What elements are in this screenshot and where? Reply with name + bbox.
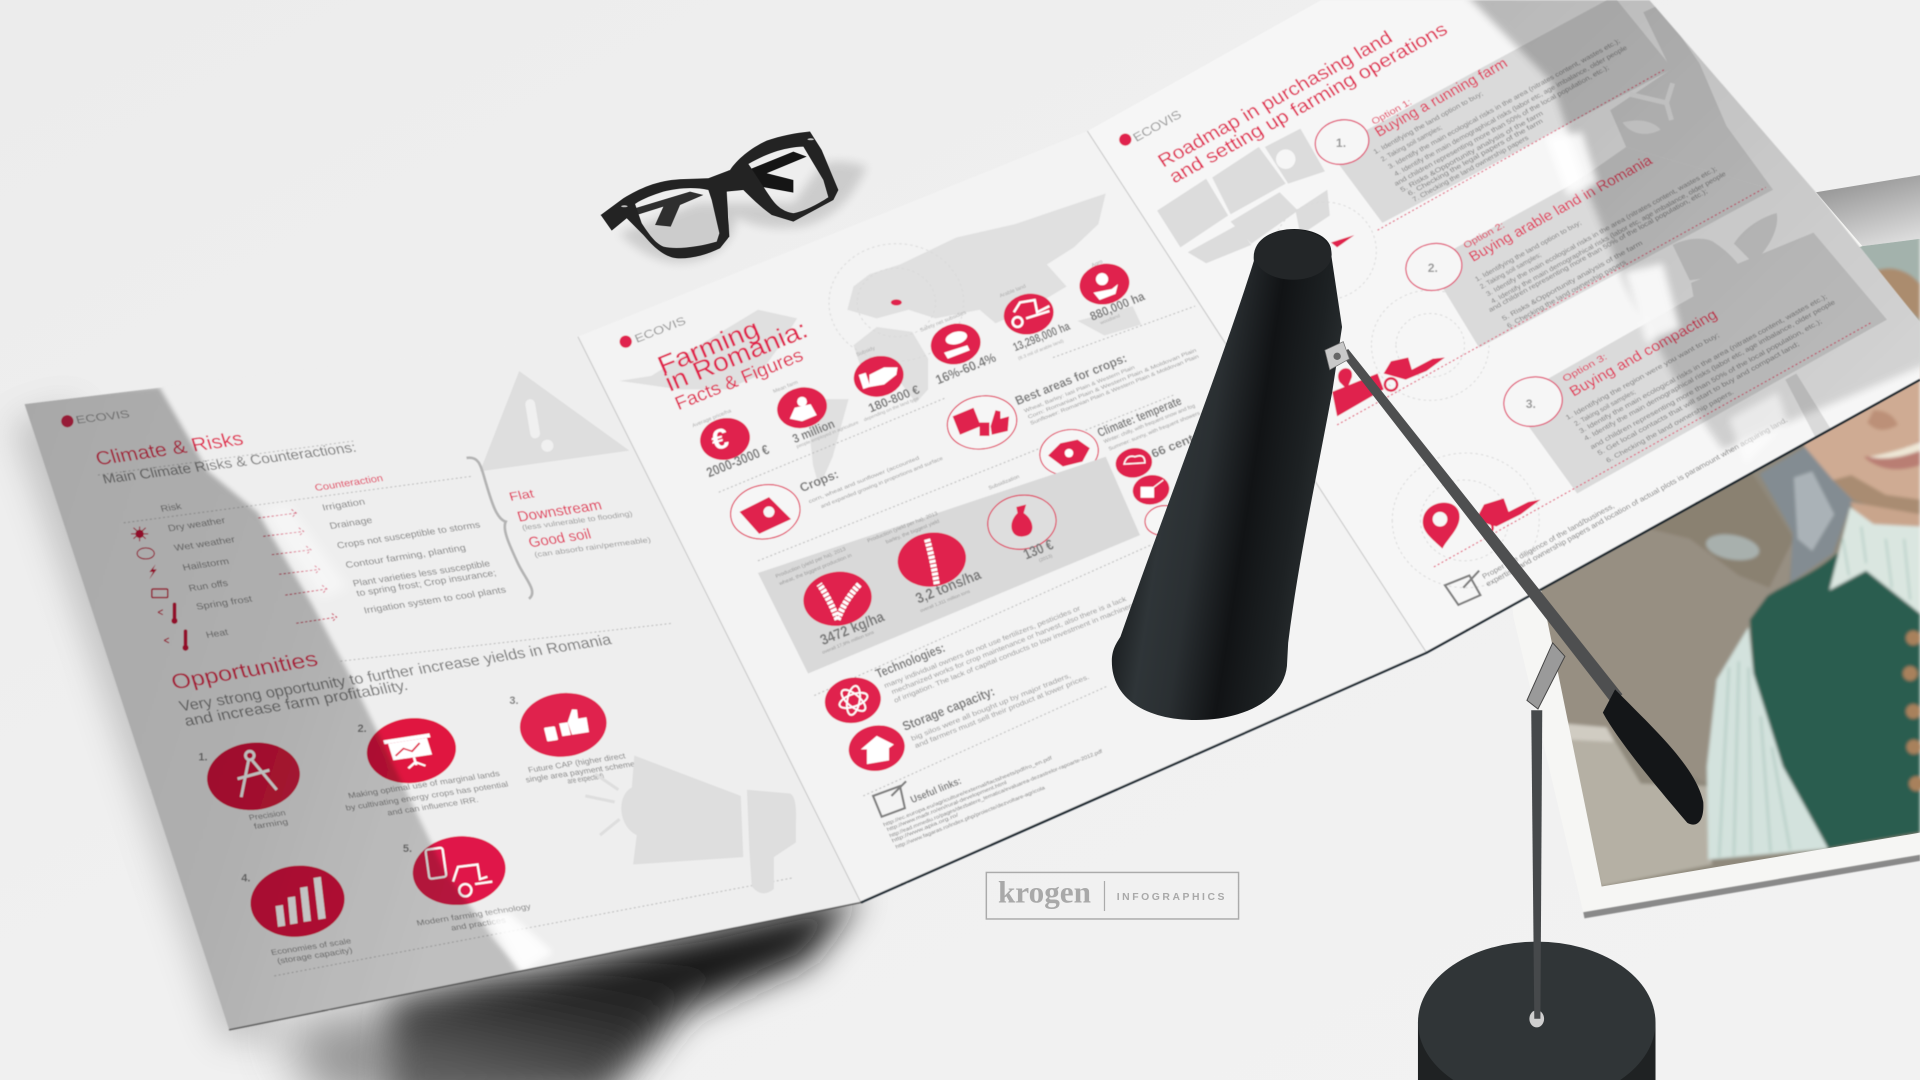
wheat yield: 3472 kg/ha xyxy=(818,609,887,649)
ecovis logo middle xyxy=(620,314,688,348)
opportunity 4: economies of scale: 4. xyxy=(241,873,250,885)
opportunities intro: and increase farm profitability. xyxy=(182,677,410,730)
neck xyxy=(1850,500,1920,528)
risk list: Heat xyxy=(205,627,230,640)
striped shirt xyxy=(1707,627,1828,860)
krogen infographics logo xyxy=(986,872,1239,919)
climate temperate: Winter: chilly, with frequent snow and fog xyxy=(1103,403,1196,445)
option 1: 1. Identifying the land option to buy; xyxy=(1372,90,1485,156)
crops: corn, wheat and sunflower (accounted xyxy=(808,456,920,505)
option 3: 1. Identifying the region were you want to buy; xyxy=(1565,332,1721,422)
watermark: wheat xyxy=(1286,551,1347,647)
ecovis logo left xyxy=(61,409,131,427)
useful links: http://ec.europa.eu/agriculture/external/factsheets/pdf/ro_en.pdf xyxy=(883,755,1054,828)
option 2: 5. Risks &Opportunity analysis of the farm xyxy=(1501,240,1645,322)
lamp pole xyxy=(1531,710,1542,1019)
storage capacity: big silos were all bought up by major traders, xyxy=(910,672,1072,743)
land type labels: Downstream xyxy=(516,498,604,525)
brochure bottom edge xyxy=(861,380,1920,902)
useful links: Useful links: xyxy=(909,775,963,806)
opportunity 3: future CAP: Future CAP (higher direct xyxy=(527,751,627,775)
option 3: 4. Identify the main demographical risks (labor etc, age imbalance, older people xyxy=(1583,299,1837,442)
opportunity 5: modern farming technology xyxy=(403,832,532,933)
gray box: option 3 xyxy=(1510,233,1887,493)
title: farming in romania: Farming xyxy=(653,313,764,380)
storage capacity: Storage capacity: xyxy=(900,684,997,734)
barley yield: overall 1,311 million tons xyxy=(919,589,972,614)
wheat yield: overall 17,9% million tons xyxy=(821,630,876,656)
vest buttons xyxy=(1903,631,1920,791)
useful links: http://ead.mmediu.ro/pages/dezbatere_tematica/evaluarea-dezastrelor-rapoarte-2012.pdf xyxy=(889,749,1104,839)
krogen infographics logo: INFOGRAPHICS xyxy=(1117,892,1225,903)
option 1: 2. Taking soil samples; xyxy=(1380,124,1444,163)
option 1: Option 1: xyxy=(1369,97,1414,127)
stat: 180-800 euro: Subsidy xyxy=(856,345,876,358)
wheat yield: wheat, the biggest production in xyxy=(778,553,853,587)
technologies: of irrigation. The lack of capital conducts to low investment in machinery xyxy=(893,601,1137,705)
opportunity 2: energy crops: by cultivating energy crops has potential xyxy=(344,780,510,813)
watermark: dashed rings xyxy=(1273,202,1539,588)
lamp joint xyxy=(1527,643,1565,709)
panel: left page xyxy=(24,337,861,1030)
useful links: http://www.fagaras.ro/index.php/proiecte/dezvoltare-agricola xyxy=(895,785,1046,850)
stat: 13,298,000 ha: 13,298,000 ha xyxy=(1011,319,1072,354)
stat: average price xyxy=(691,408,772,481)
ecovis logo right: ECOVIS xyxy=(1130,108,1184,145)
background sky xyxy=(1760,447,1853,583)
counteraction list: Irrigation xyxy=(321,497,366,513)
opportunity 3: future CAP: are expected) xyxy=(566,772,605,786)
due diligence note xyxy=(1445,415,1789,605)
subheading: main climate risks: Main Climate Risks & Counteractions: xyxy=(100,439,358,487)
best areas for crops: Wheat, Barley: Iasi Plain & Western Plain xyxy=(1023,365,1136,414)
watermark: megaphone xyxy=(585,756,796,893)
useful links: http://www.madr.ro/en/rural-development.html xyxy=(886,780,1008,833)
gloss shadow: left page xyxy=(12,387,529,1041)
option 3: and children representing more than 50% of the local population, etc.); xyxy=(1589,318,1824,451)
stat: 180-800 euro: 180-800 € xyxy=(866,382,922,415)
wheat yield: Production (yield per ha), 2013 xyxy=(775,546,847,580)
barley yield: 3,2 tons/ha xyxy=(913,567,984,607)
wheat yield xyxy=(775,546,887,656)
best areas for crops: Sunflower: Romanian Plain & Western Plain & Moldovan Plain xyxy=(1029,354,1200,427)
subsidies: Subsidization xyxy=(988,474,1021,492)
lamp base xyxy=(1418,942,1656,1080)
watermark: warning triangle xyxy=(480,371,629,471)
top background xyxy=(1860,239,1920,365)
land type labels: Flat xyxy=(507,487,536,504)
opportunity 2: energy crops: and can influence IRR. xyxy=(386,795,480,817)
option 2: 3. Identify the main ecological risks in the area (nitrates content, wastes etc.); xyxy=(1485,166,1719,298)
opportunity 1: precision farming: farming xyxy=(253,817,289,831)
risk list xyxy=(167,515,254,640)
opportunity 1: precision farming xyxy=(198,738,303,831)
title: roadmap: and setting up farming operations xyxy=(1165,19,1452,188)
opportunity 5: modern farming technology: and practices xyxy=(450,916,507,933)
opportunity 5: modern farming technology: 5. xyxy=(403,843,412,855)
best areas for crops xyxy=(943,348,1200,454)
counteraction list: to spring frost; Crop insurance; xyxy=(355,568,497,598)
watermark: land map xyxy=(1157,129,1330,263)
stat: percentages xyxy=(919,310,998,387)
red tractor and pin icons xyxy=(1331,235,1540,549)
counteraction list: Drainage xyxy=(328,515,374,531)
opportunity 2: energy crops: 2. xyxy=(358,723,367,735)
risk list: Hailstorm xyxy=(181,556,231,573)
option 2: Buying arable land in Romania xyxy=(1466,152,1656,265)
land type labels xyxy=(507,487,652,559)
crops xyxy=(726,456,944,544)
table header: Counteraction xyxy=(314,473,385,494)
option 1: 6. Checking the legal papers of the farm xyxy=(1407,118,1545,198)
opportunities intro: Very strong opportunity to further increase yields in Romania xyxy=(177,631,614,715)
ecovis logo right xyxy=(1119,108,1184,146)
technologies: mechanized works for crop maintenance or harvest, also there is a lack xyxy=(890,595,1128,696)
climate temperate: Climate: temperate xyxy=(1095,393,1184,440)
stat: 3 million xyxy=(772,380,860,450)
risk list: Wet weather xyxy=(173,534,236,553)
watermark: tree leaves lower xyxy=(1673,213,1831,438)
opportunity 4: economies of scale xyxy=(241,861,354,966)
option 2: 1. Identifying the land option to buy; xyxy=(1474,220,1583,283)
option 2: 2. Taking soil samples; xyxy=(1479,252,1543,291)
lamp xyxy=(1112,229,1703,1080)
photo image area xyxy=(1541,239,1920,886)
option 1: 7. Checking the land ownership papers xyxy=(1412,134,1531,204)
table header xyxy=(159,473,385,514)
subsidies: 130 € xyxy=(1021,537,1056,563)
useful links: http://www.apia.org.ro/ xyxy=(891,812,960,844)
opportunity 4: economies of scale: (storage capacity) xyxy=(276,946,354,966)
counteraction list: Irrigation system to cool plants xyxy=(362,585,508,615)
risk list: Run offs xyxy=(187,578,230,593)
option 3 xyxy=(1499,293,1837,465)
land type labels: (can absorb rain/permeable) xyxy=(533,535,652,559)
gray box: option 1 xyxy=(1329,0,1673,223)
heading: climate and risks: Climate & Risks xyxy=(93,428,246,470)
barley yield: Production (yield per ha), 2013 xyxy=(867,511,939,544)
option 1 xyxy=(1311,38,1629,204)
storage capacity: and farmers must sell their product at lower prices. xyxy=(914,673,1091,750)
stat: average price: Average price/ha xyxy=(691,408,732,429)
counteraction list: Plant varieties less susceptible xyxy=(351,558,491,588)
option 1: Buying a running farm xyxy=(1372,56,1511,140)
option 1: and children representing more than 50% of the local population, etc.); xyxy=(1393,64,1611,188)
option 2: 6. Checking the land ownership papers xyxy=(1506,259,1628,330)
opportunity 2: energy crops xyxy=(344,714,510,817)
option 1: 1. xyxy=(1336,136,1346,150)
technologies: many individual owners do not use fertilizers, pesticides or xyxy=(883,604,1082,690)
stat: 180-800 euro xyxy=(850,345,922,423)
stat: average price: 2000-3000 € xyxy=(704,442,772,481)
barley yield xyxy=(867,511,984,614)
option 3: 6. Checking the land ownership papers. xyxy=(1605,389,1736,465)
gloss highlight: left page xyxy=(263,502,553,973)
land type labels: Good soil xyxy=(527,527,593,551)
stat: 3 million: people employed in agriculture xyxy=(796,420,860,450)
map rings xyxy=(829,244,964,361)
option 1: 4. Identify the main demographical risks (labor etc, age imbalance, older people xyxy=(1393,45,1629,178)
lamp shade cap xyxy=(1254,230,1332,280)
risk to counteraction arrows xyxy=(258,509,337,623)
stat: 880,000 ha xyxy=(1076,259,1147,326)
ecovis logo left: ECOVIS xyxy=(74,409,131,427)
background animal tones xyxy=(1748,584,1784,624)
krogen infographics logo: krogen xyxy=(998,875,1091,909)
title: roadmap: Roadmap in purchasing land xyxy=(1154,28,1397,172)
crops: and expanded growing in proportions and surface xyxy=(820,456,944,510)
lamp arm xyxy=(1341,349,1622,703)
table header: Risk xyxy=(159,501,183,514)
best areas for crops: Corn: Romanian Plain & Western Plain & Moldovan Plain xyxy=(1027,348,1198,421)
option 3: Buying and compacting xyxy=(1567,307,1720,400)
lamp bracket xyxy=(1325,342,1349,370)
stat: 3 million: Mean farm xyxy=(772,380,800,395)
option 1: 3. Identify the main ecological risks in the area (nitrates content, wastes etc.); xyxy=(1387,38,1622,171)
opportunity 1: precision farming: 1. xyxy=(198,751,208,763)
option 3: 5. Get local contacts that will start to buy and compact land; xyxy=(1596,341,1801,457)
watermark: world map xyxy=(620,193,1141,487)
subsidies xyxy=(984,474,1060,564)
barley yield: barley, the biggest yield xyxy=(885,519,941,545)
brace xyxy=(467,458,532,599)
shirt collar xyxy=(1829,507,1920,613)
title: farming in romania: in Romania: xyxy=(660,314,812,397)
stat: 880,000 ha: 880,000 ha xyxy=(1088,289,1147,323)
gray box: option 2 xyxy=(1428,147,1773,348)
option 3: Option 3: xyxy=(1560,352,1609,384)
watermark: tree silhouette upper xyxy=(1610,5,1773,190)
stat: 180-800 euro: depending on the land type xyxy=(863,396,920,423)
crops: Crops: xyxy=(797,467,841,495)
counteraction list: Crops not susceptible to storms xyxy=(336,520,482,550)
land type labels: (less vulnerable to flooding) xyxy=(521,509,634,532)
technologies: Technologies: xyxy=(873,640,947,681)
stat: 880,000 ha: woodland xyxy=(1099,313,1121,326)
brochure cast shadow xyxy=(12,404,861,1080)
risk icons xyxy=(131,527,189,651)
lamp shade xyxy=(1112,229,1342,720)
yield band xyxy=(758,457,1140,673)
fold lines xyxy=(578,131,1427,902)
stat: 13,298,000 ha: Arable land xyxy=(999,284,1027,299)
counteraction list xyxy=(321,497,508,615)
climate temperate: Summer: sunny, with frequent showers xyxy=(1108,411,1201,452)
frame xyxy=(601,132,838,258)
panel: right page xyxy=(1087,0,1920,653)
stat: 13,298,000 ha: (8.3 mil of arable land) xyxy=(1017,338,1065,362)
opportunity 3: future CAP: 3. xyxy=(509,695,519,707)
ecovis logo middle: ECOVIS xyxy=(632,314,688,346)
background pot xyxy=(1572,737,1713,886)
photo of farmer behind brochure xyxy=(1541,175,1920,919)
risk list: Spring frost xyxy=(195,594,254,612)
glasses xyxy=(601,132,867,263)
title: farming in romania: Facts & Figures xyxy=(672,345,806,415)
glasses shadow xyxy=(620,162,867,263)
panel: middle page xyxy=(578,131,1427,902)
risk list: Dry weather xyxy=(167,515,226,533)
temple arms xyxy=(635,192,703,227)
gloss highlight: right page xyxy=(1545,132,1788,465)
opportunity 4: economies of scale: Economies of scale xyxy=(270,936,353,957)
due diligence note: Proper due diligence of the land/business, xyxy=(1480,501,1616,581)
heading: opportunities: Opportunities xyxy=(168,647,321,694)
storage capacity xyxy=(845,672,1091,775)
green vest xyxy=(1750,553,1920,849)
romania marker xyxy=(891,299,902,306)
option 3: 3. xyxy=(1526,397,1536,411)
stat: 3 million: 3 million xyxy=(790,416,837,446)
option 3: 2. Taking soil samples; xyxy=(1573,389,1637,428)
best areas for crops: Best areas for crops: xyxy=(1013,351,1129,408)
climate temperate xyxy=(1036,393,1201,538)
opportunity 2: energy crops: Making optimal use of marginal lands xyxy=(347,769,501,800)
technologies xyxy=(821,595,1137,728)
stat: average price: € xyxy=(709,423,732,457)
option 1: 5. Risks &Opportunity analysis of the farm xyxy=(1399,110,1545,194)
option 3: 3. Identify the main ecological risks in the area (nitrates content, wastes etc.); xyxy=(1578,293,1829,435)
stat: percentages: Safety net subsidies xyxy=(919,310,968,334)
counteraction list: Contour farming, planting xyxy=(344,543,467,570)
opportunity 1: precision farming: Precision xyxy=(248,808,287,822)
option 2 xyxy=(1401,152,1728,330)
option 2: 2. xyxy=(1428,261,1438,275)
stat: 880,000 ha: Agro xyxy=(1091,259,1104,269)
opportunity 5: modern farming technology: Modern farming technology xyxy=(415,902,532,928)
farmer face xyxy=(1802,369,1920,501)
option 2: 4. Identify the main demographical risks (labor etc, age imbalance, older people xyxy=(1490,171,1728,305)
stat: percentages: 16%-60.4% xyxy=(933,350,998,387)
opportunity 3: future CAP: single area payment scheme xyxy=(524,759,637,784)
opportunity 3: future CAP xyxy=(509,689,637,786)
gloss shadow: right page xyxy=(1466,0,1920,449)
option 2: Option 2: xyxy=(1461,220,1507,250)
stat: 13,298,000 ha xyxy=(999,284,1072,362)
climate temperate: 66 cent xyxy=(1149,432,1196,461)
due diligence note: expertise land ownership papers and location of actual plots is paramount when acquiring land. xyxy=(1484,415,1789,588)
lamp handle xyxy=(1603,689,1703,825)
option 2: and children representing more than 50% of the local population, etc.); xyxy=(1487,188,1709,314)
subsidies: (2013) xyxy=(1038,553,1054,564)
